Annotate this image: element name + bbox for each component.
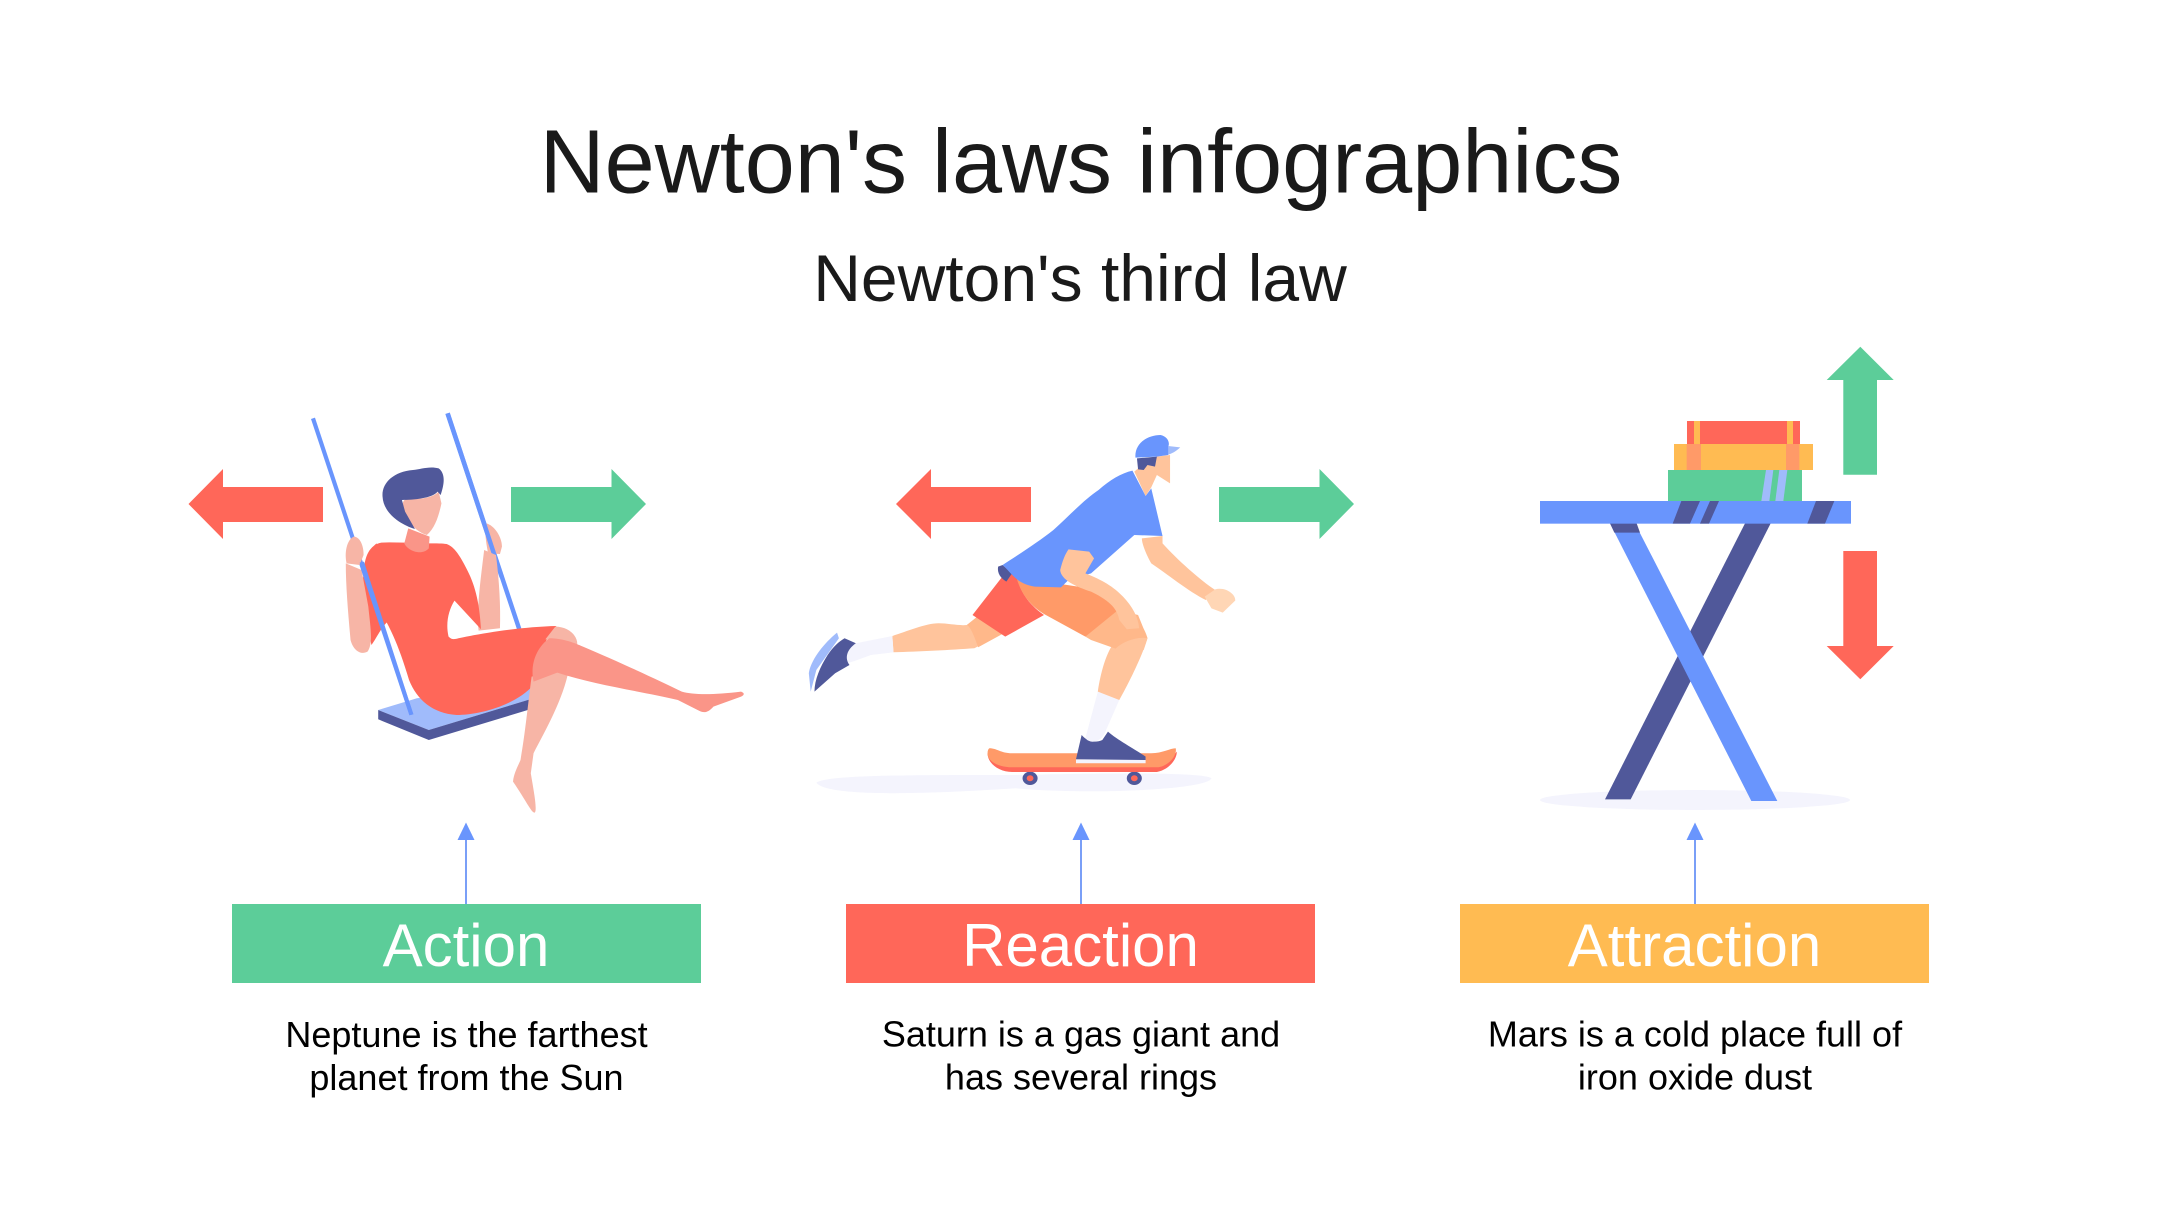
small arrow up (458, 822, 474, 904)
arrow: green right (511, 469, 646, 539)
label: action (232, 904, 701, 983)
arrow: red down (1827, 551, 1894, 679)
label: reaction (846, 904, 1315, 983)
panel: attraction (1460, 347, 1929, 1098)
arrow: red left (188, 469, 323, 539)
illustration: table with books (1540, 421, 1851, 810)
description: reaction: has several rings (945, 1056, 1217, 1098)
description: action: planet from the Sun (309, 1057, 624, 1098)
label: attraction: Attraction (1568, 912, 1821, 979)
illustration: skateboarder (809, 435, 1235, 793)
label: attraction (1460, 904, 1929, 983)
title: Newton's laws infographics (540, 112, 1622, 212)
small arrow up (1072, 822, 1090, 904)
illustration: woman on swing (311, 413, 744, 813)
description: reaction: Saturn is a gas giant and (882, 1014, 1280, 1054)
arrow: red left (896, 469, 1031, 539)
subtitle: Newton's third law (813, 241, 1347, 315)
label: action: Action (383, 912, 549, 979)
small arrow up (1686, 822, 1704, 904)
description: attraction: Mars is a cold place full of (1488, 1014, 1903, 1054)
description: action: Neptune is the farthest (285, 1014, 648, 1055)
arrow: green up (1827, 347, 1894, 475)
arrow: green right (1219, 469, 1354, 539)
panel: action (188, 413, 744, 1098)
panel: reaction (809, 435, 1354, 1098)
label: reaction: Reaction (962, 912, 1199, 979)
description: attraction: iron oxide dust (1578, 1056, 1812, 1098)
